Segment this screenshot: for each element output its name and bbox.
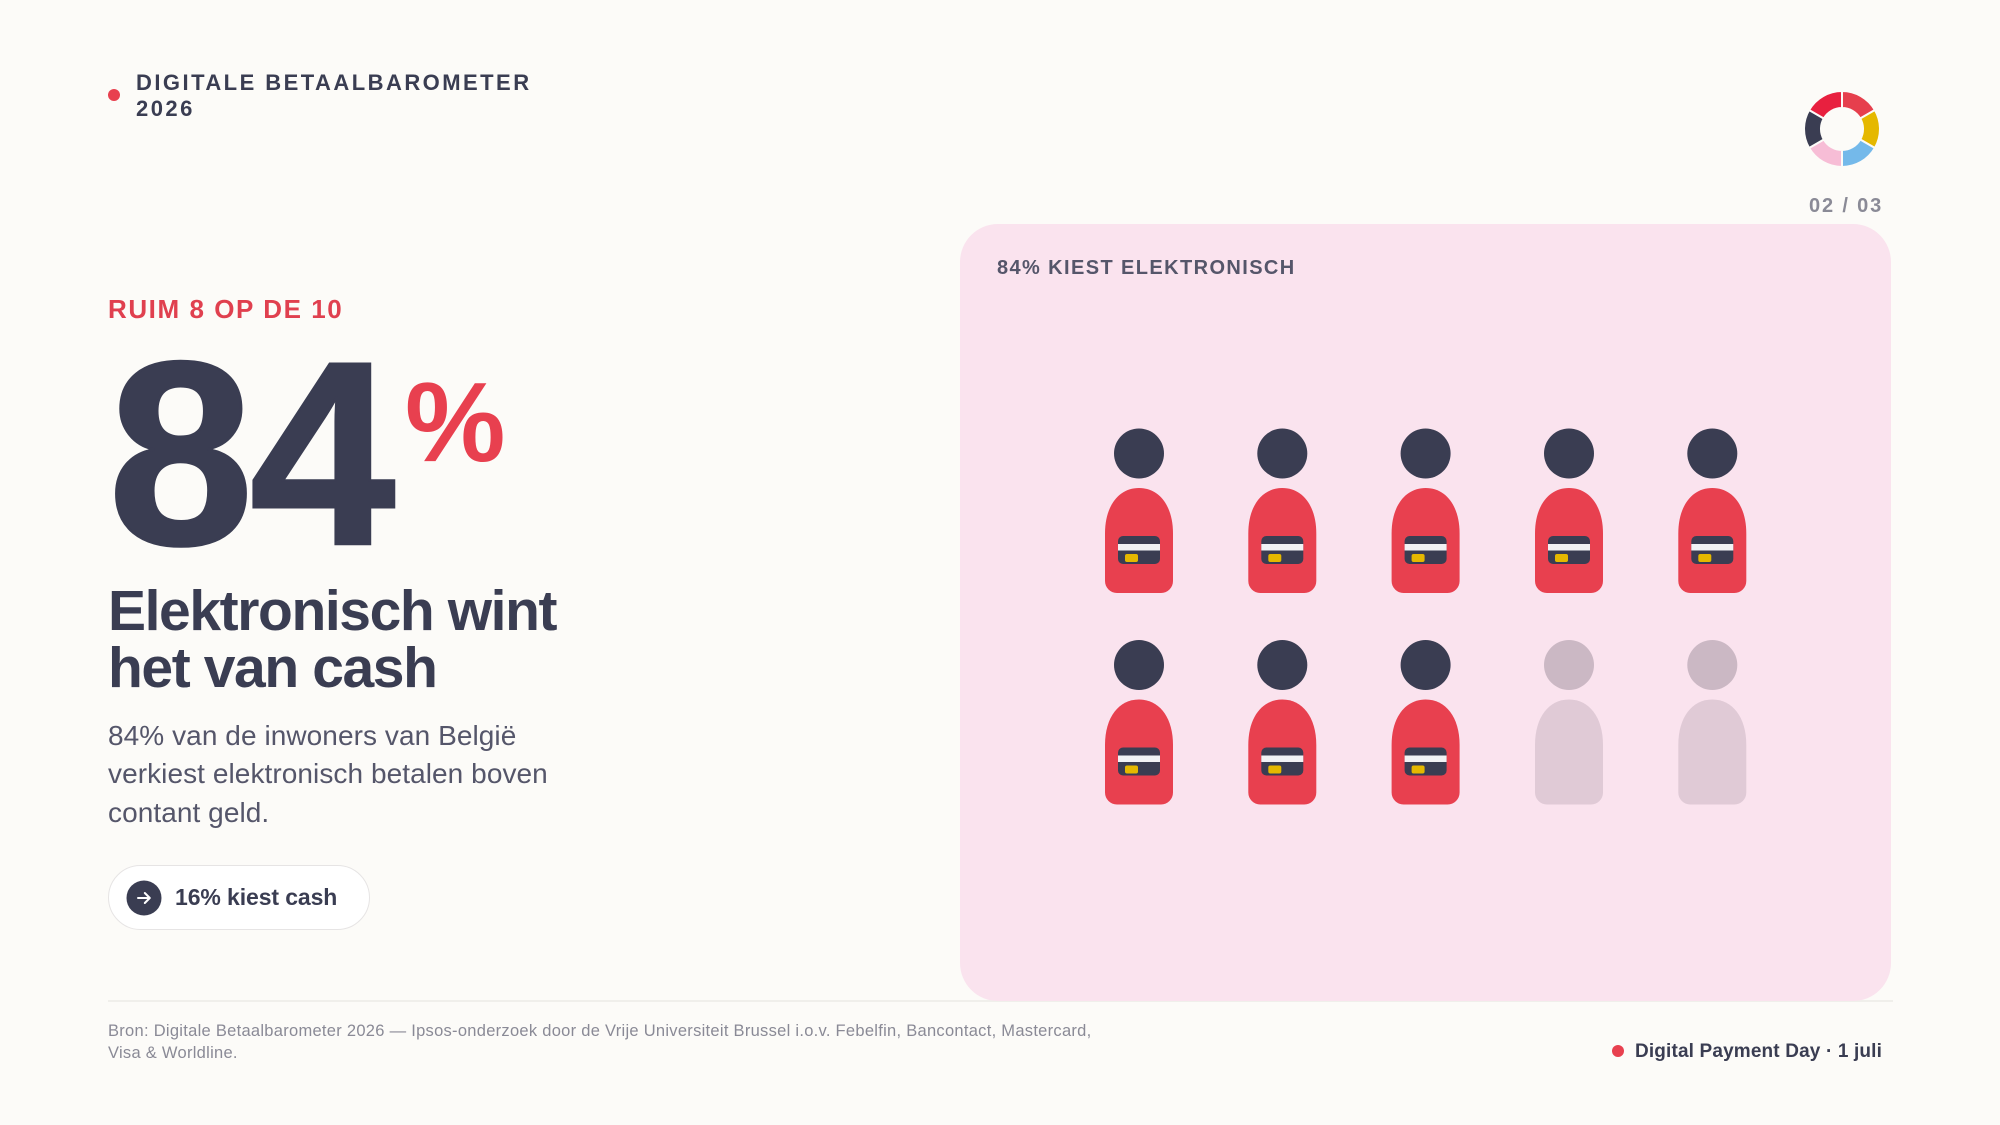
source note: Bron: Digitale Betaalbarometer 2026 — Ipsos-onderzoek door de Vrije Universiteit Brussel i.o.v. Febelfin, Bancontact, Mastercard,	[108, 1022, 1092, 1040]
footer divider line	[108, 1000, 1893, 1002]
header dot	[108, 89, 120, 101]
panel heading: 84% KIEST ELEKTRONISCH	[997, 257, 1296, 279]
icon: donut logo	[1805, 92, 1879, 166]
person 3	[1392, 428, 1460, 593]
big number 84: 84	[108, 307, 391, 600]
source note: Visa & Worldline.	[108, 1044, 238, 1062]
person 5	[1678, 428, 1746, 593]
footer tag	[1612, 1041, 1882, 1062]
icon: arrow in circle	[126, 880, 162, 916]
person 7	[1248, 640, 1316, 804]
header text	[136, 70, 532, 121]
person 8	[1392, 640, 1460, 804]
person 6	[1105, 640, 1173, 804]
person 2	[1248, 428, 1316, 593]
headline: Elektronisch wint	[108, 579, 556, 643]
person 4	[1535, 428, 1603, 593]
kicker: RUIM 8 OP DE 10	[108, 294, 343, 324]
panel: pictogram 84% kiest elektronisch	[960, 224, 1891, 1001]
body text: 84% van de inwoners van België	[108, 720, 516, 750]
header: report title	[108, 70, 532, 121]
headline	[108, 579, 557, 700]
footer dot	[1612, 1045, 1624, 1057]
percent sign: %	[405, 359, 505, 485]
header text: DIGITALE BETAALBAROMETER	[136, 70, 532, 95]
body text: contant geld.	[108, 797, 269, 828]
footer label: Digital Payment Day · 1 juli	[1635, 1041, 1882, 1062]
source note	[108, 1022, 1092, 1062]
pill label: 16% kiest cash	[175, 884, 337, 910]
headline: het van cash	[108, 636, 437, 700]
person 10 muted	[1678, 640, 1746, 804]
person 1	[1105, 428, 1173, 593]
page number: 02 / 03	[1809, 195, 1883, 217]
person 9 muted	[1535, 640, 1603, 804]
header text: 2026	[136, 96, 195, 121]
body text: verkiest elektronisch betalen boven	[108, 758, 548, 789]
pictogram chart: 10 people	[1105, 428, 1746, 804]
pill: 16% kiest cash	[108, 865, 370, 930]
body text	[108, 720, 548, 828]
